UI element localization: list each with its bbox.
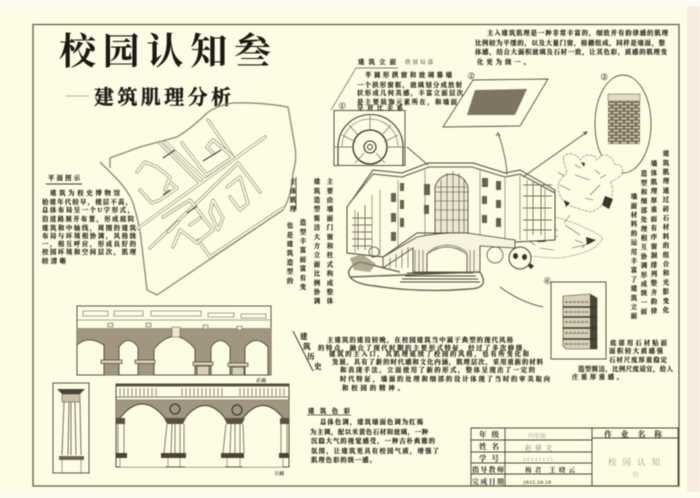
paragraph: building colour: 沉稳大气的视觉感受，一种古朴典雅的	[311, 436, 436, 446]
vertical text: right column: 造型和细部处理相互协调形成统一而	[640, 169, 647, 317]
paragraph: top right: 主入建筑肌理是一种非常丰富的，细致并有韵律感的肌理	[487, 28, 669, 38]
drawing name	[604, 429, 663, 479]
building perspective drawing	[347, 163, 555, 290]
shrubs	[350, 247, 534, 272]
pier bases	[101, 360, 248, 375]
paragraph: facade: 状形成几何美感，丰富立面层次	[357, 88, 464, 98]
paragraph: facade: 是主要装饰元素所在，和墙面	[357, 97, 458, 107]
paragraph: top right: 化更为统一。	[477, 57, 530, 66]
detail: stone block box: ④	[544, 276, 551, 285]
title: 校园认知叁	[59, 31, 271, 73]
upper band panels	[77, 311, 271, 320]
vertical text: right column	[630, 149, 669, 322]
vertical text: right column: 墙体肌理厚重而有序窗洞排列整齐韵律	[650, 159, 657, 316]
arch spandrels	[116, 400, 289, 420]
paragraph: building history: 主建筑的建设较晚，在校园建筑当中属于典型的现代风格	[327, 335, 514, 345]
vertical text: right column: 墙面材料的运用丰富了建筑立面	[630, 192, 637, 322]
keystones	[108, 323, 242, 337]
paragraph: site plan: 沿道路展开布置，形成庭院	[42, 214, 135, 224]
building labels on the map	[163, 150, 221, 213]
paragraph: building history: 和表现手法，立面使用了新的形式，整体呈现出了一定的	[340, 365, 536, 375]
entrance podium	[383, 233, 515, 272]
elevation drawing: lower arcade	[116, 384, 289, 477]
elevation label: 正面	[256, 377, 266, 384]
wing window grids	[352, 182, 552, 250]
detail: parallelogram texture: ②	[468, 71, 475, 80]
drawing name: 作业名称	[604, 429, 663, 439]
balustrade	[116, 384, 289, 386]
paragraph: top right: 体感，结合大面积玻璃及石材一致，让其色彩，质感的肌理变	[475, 47, 668, 57]
heading: building history: 史	[314, 361, 322, 371]
paragraph: stone note: 面积较大质感强	[609, 346, 664, 355]
heading: facade	[331, 57, 433, 110]
paragraph: building history: 的特点，融合了现代时期的主要形式特征，经过了多次修缮，	[318, 343, 530, 353]
paragraph: building colour: 总体色调，建筑墙面色调为红褐	[320, 417, 424, 427]
paragraph: building history: 建筑的主入口，其肌理延续了校园的风格，也有所变化和	[329, 349, 530, 359]
section: building colour	[307, 406, 442, 464]
paragraph: site plan: 校园环境和空间层次，肌理	[42, 247, 137, 257]
paragraph: top right: 比例较为平缓的，以及大量门窗，格栅组成，同样是墙面，整	[475, 38, 666, 48]
table values: 四年级	[528, 432, 546, 440]
campus roads	[138, 120, 283, 257]
heading: building history: 筑	[303, 341, 311, 351]
heading: building colour: 建筑色彩	[308, 406, 351, 415]
drawing name: 校园认知	[608, 457, 660, 467]
detail: arched window: ①	[339, 101, 346, 110]
elevation drawing: upper arcade	[77, 306, 271, 384]
paragraph: building history: 和校园的精神。	[342, 383, 404, 392]
vertical columns: 建筑造型简洁大方立面比例协调	[312, 177, 320, 307]
entrance steps	[400, 273, 480, 282]
subtitle: 建筑肌理分析	[94, 85, 231, 109]
campus buildings	[137, 140, 248, 247]
paragraph: site plan: 建筑和中轴线，周围的建筑	[42, 223, 137, 233]
heading: facade: 建筑立面	[358, 57, 397, 66]
section: building history	[293, 331, 553, 392]
title block table	[471, 428, 678, 486]
table labels: 姓名	[479, 441, 499, 451]
vertical columns: 主要由墙面门窗和柱式构成整体	[326, 177, 333, 307]
paragraph: stone note: 底部用石材贴面	[610, 338, 668, 347]
plaza	[349, 262, 483, 290]
table labels: 指导教师	[472, 465, 504, 474]
table values	[523, 432, 576, 486]
facade label and intro	[331, 57, 466, 112]
heading: site plan: 平面图示	[48, 173, 81, 182]
detail: parallelogram texture	[443, 71, 548, 127]
paragraph: site plan: 总体布局呈一个U字形式，	[42, 205, 134, 215]
detail: column	[53, 383, 89, 473]
site plan map	[100, 103, 296, 295]
table values: 梅君 王晓云	[525, 465, 576, 474]
paragraph: facade: 一个拱形窗框，玻璃划分成放射	[357, 80, 463, 90]
detail: arched window	[334, 101, 405, 166]
paragraph: facade: 半圆形拱窗和玻璃幕墙	[365, 70, 453, 79]
heading: building history: 建	[300, 331, 308, 341]
heading: building history	[293, 331, 322, 371]
central arched window	[435, 171, 468, 233]
vertical columns	[286, 177, 333, 307]
trees behind building	[505, 154, 622, 258]
paragraph: stone note: 石材尺度厚重稳定	[609, 355, 668, 364]
wing and tower masses	[347, 163, 555, 257]
medallions	[170, 404, 242, 415]
table labels: 学号	[479, 453, 500, 463]
paragraph: facade: 呈对比关系	[357, 103, 404, 112]
paragraph: stone note: 造型简洁，比例尺度适宜，给人	[578, 364, 674, 374]
table labels: 年级	[479, 429, 500, 439]
roof band	[349, 167, 555, 204]
paragraph: site plan: 较清晰	[42, 256, 67, 265]
detail: brick oval: ③	[601, 72, 608, 81]
vertical columns: 也是建筑造型的	[286, 221, 293, 286]
table values: 20141135	[523, 457, 553, 463]
text block: site plan notes	[42, 173, 139, 265]
paragraph: building colour: 氛围，让建筑更具有校园气质，增强了	[311, 446, 439, 456]
detail: stone block box	[544, 276, 606, 359]
leader arrows	[407, 132, 587, 307]
vertical pilasters	[355, 170, 545, 258]
drawing name: 叁	[632, 470, 639, 479]
paragraph: site plan: 一，相互呼应，形成良好的	[42, 239, 137, 249]
heading: building history: 历	[307, 351, 315, 361]
paragraph: building colour: 肌理色彩的统一感。	[311, 455, 376, 464]
columns	[116, 418, 289, 467]
paragraph: site plan: 布局与环境相协调，风格统	[42, 231, 137, 241]
paragraph: building history: 发展，具有了新的时代感和文化内涵，肌理层次，采用重新的材料	[332, 357, 544, 367]
heading: facade: 拱窗局部	[405, 58, 433, 66]
detail: brick oval	[595, 72, 651, 173]
table values: 赵留文	[525, 443, 552, 452]
windows	[391, 178, 501, 241]
paragraph: building history: 时代特征，墙面的处理和细部的设计体现了当时的审美取向	[340, 374, 551, 384]
table labels	[472, 429, 504, 486]
heading: building texture: 主体肌理	[288, 177, 296, 215]
paragraph: site plan: 建筑为校史博物馆	[50, 188, 121, 197]
elevation label: 立面	[274, 470, 284, 477]
paragraph: stone note: 庄重厚重感。	[572, 372, 623, 381]
table values: 2015.10.18	[523, 480, 551, 486]
vertical text: right column: 建筑肌理通过砖石材料的组合和光影变化	[662, 149, 669, 316]
map outline	[100, 103, 296, 295]
vertical columns: 造型丰富而富有变	[298, 218, 306, 293]
vertical text: building texture	[286, 177, 333, 307]
wall and arched openings	[77, 328, 271, 375]
table labels: 完成日期	[472, 477, 504, 486]
paragraph: building colour: 为主调，配以米黄色石材和玻璃，一种	[310, 427, 429, 437]
paragraph: site plan: 始建年代较早，楼层不高，	[42, 197, 132, 207]
